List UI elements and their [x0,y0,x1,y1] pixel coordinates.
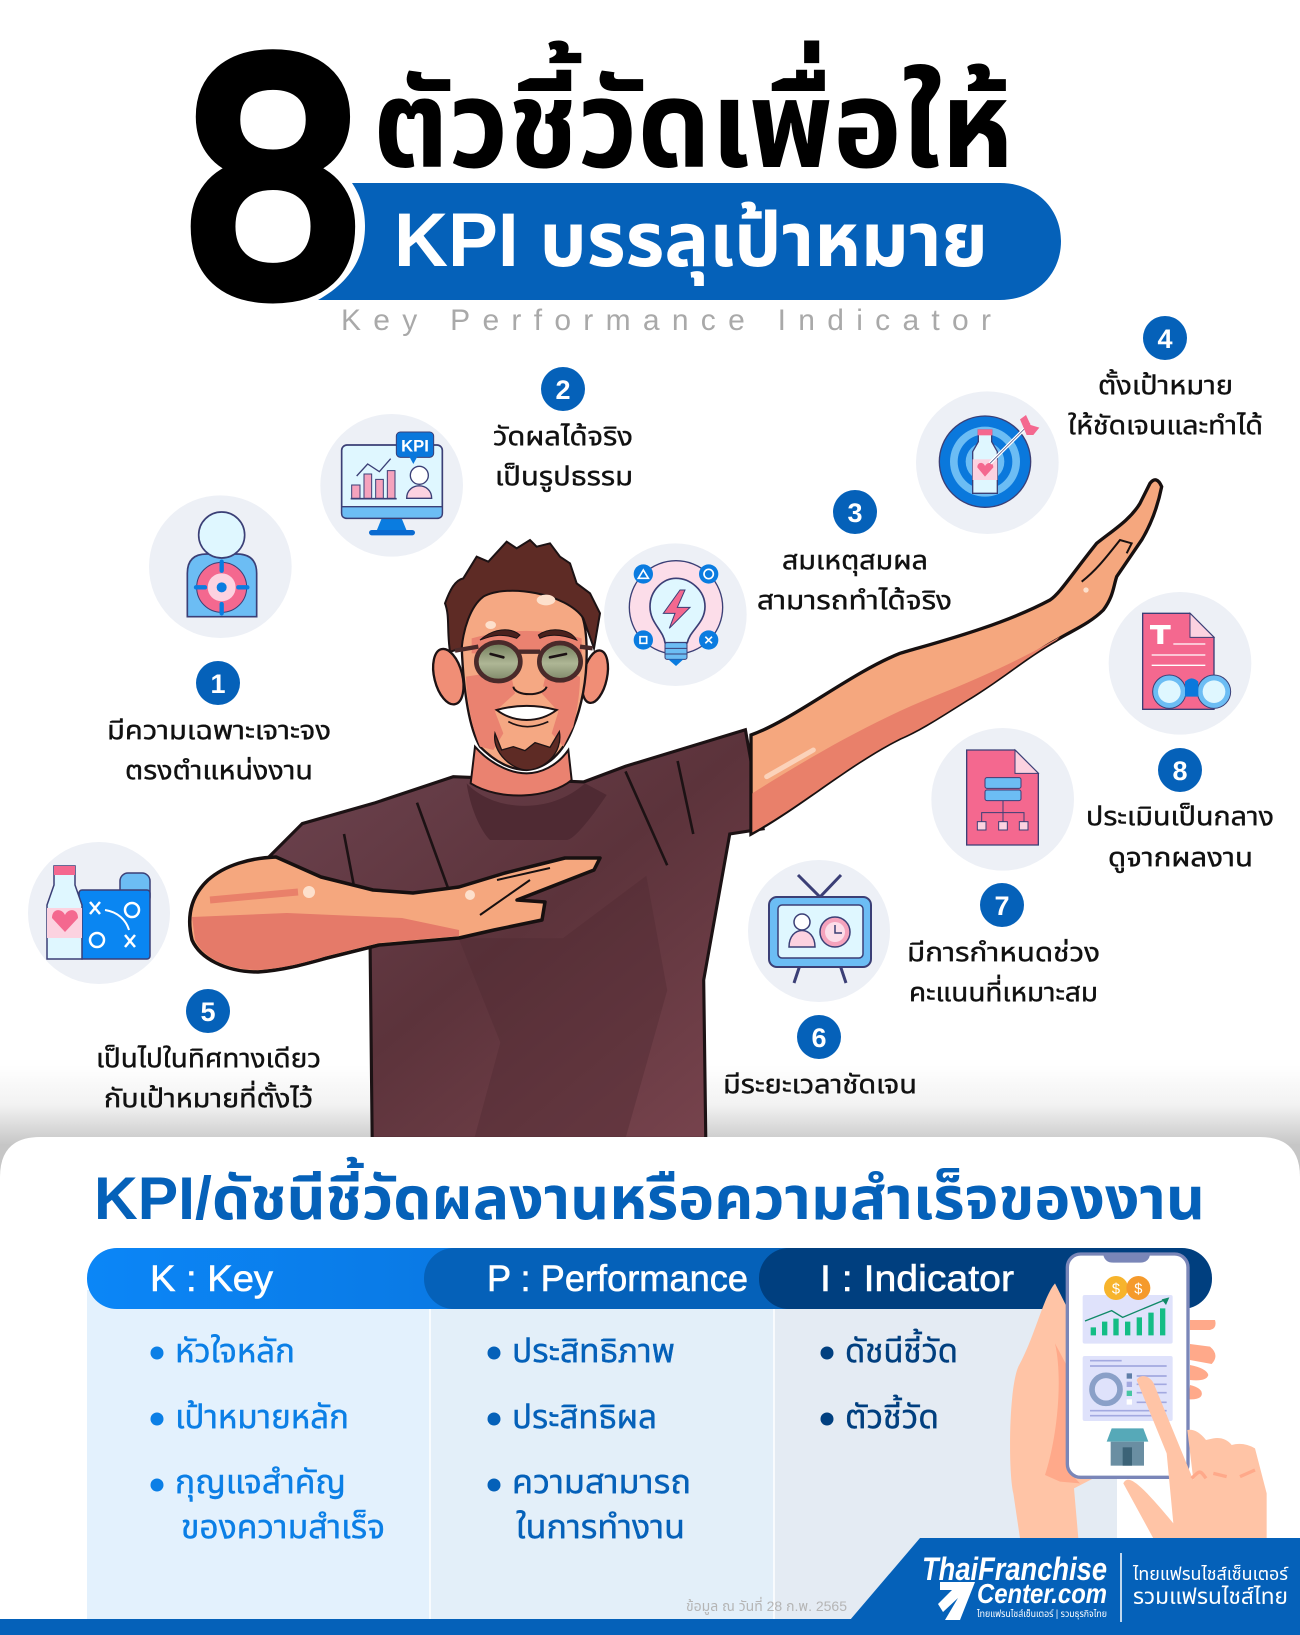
date note: ข้อมูล ณ วันที่ 28 ก.พ. 2565 [686,1596,847,1615]
logo: ThaiFranchise Center: ไทยแฟรนไชส์เซ็นเตอร์ | รวมธุรกิจไทย [976,1607,1107,1620]
column K list [151,1332,385,1545]
panel: KPI definition [0,1137,1300,1635]
title: first line: ตัวชี้วัดเพื่อให้ [373,40,1013,193]
face [462,588,587,770]
item 1: มีความเฉพาะเจาะจง [107,715,331,745]
shirt [269,730,763,1138]
item 5: 5 [200,997,216,1027]
icon 2: KPI monitor: KPI [401,436,429,455]
panel heading: KPI/ดัชนีชี้วัดผลงานหรือความสำเร็จของงาน [94,1156,1205,1232]
column P list: ความสามารถ [512,1463,691,1500]
icon: logo arrow [938,1582,975,1620]
raised arm [751,480,1162,834]
item 7: มีการกำหนดช่วง [907,937,1100,967]
item 3: 3 [847,498,863,528]
item 1: ตรงตำแหน่งงาน [125,755,313,785]
item 6: มีระยะเวลาชัดเจน [723,1069,917,1099]
column K list: ของความสำเร็จ [181,1508,385,1545]
column P list: ประสิทธิผล [512,1398,657,1435]
hair [445,540,600,652]
subtitle: Key Performance Indicator [341,304,991,337]
column I list: ตัวชี้วัด [845,1394,939,1435]
illustration: man dabbing [190,480,1162,1138]
ears [428,646,469,708]
title: number 8: 8 [178,0,368,366]
logo: ThaiFranchise Center [850,1538,1300,1622]
item 8: ดูจากผลงาน [1108,842,1253,873]
icon 7: document with hierarchy [931,728,1074,871]
item 6 [723,1015,917,1099]
column I list [821,1328,958,1435]
column headers: P : Performance [487,1258,748,1299]
item 2: วัดผลได้จริง [493,421,633,451]
item 4: ตั้งเป้าหมาย [1098,368,1233,400]
icon 2: KPI monitor [320,414,463,557]
item 1 [107,661,331,785]
item 3: สมเหตุสมผล [782,545,928,576]
item 3 [757,490,952,615]
icon 1: person with target [149,495,292,638]
column headers [87,1248,1212,1309]
beard [495,732,560,770]
item 7: คะแนนที่เหมาะสม [909,974,1098,1007]
column K list: เป้าหมายหลัก [175,1398,349,1435]
item 8 [1086,748,1274,873]
neck [471,747,572,796]
item 4: ให้ชัดเจนและทำได้ [1068,410,1263,440]
illustration: hand holding phone [1010,1254,1267,1538]
item 2: 2 [555,375,571,405]
column I list: ดัชนีชี้วัด [845,1328,958,1369]
column K list: หัวใจหลัก [175,1332,295,1369]
item 5: เป็นไปในทิศทางเดียว [96,1043,321,1073]
folded arm [190,857,600,972]
icon 8: document with binoculars [1109,592,1251,735]
column P list: ในการทำงาน [516,1508,685,1545]
column headers: I : Indicator [820,1258,1014,1299]
icon 4: target with bottle and arrow [916,391,1059,534]
column P list: ประสิทธิภาพ [512,1332,675,1369]
nose and mouth [513,687,547,694]
column P list [488,1332,691,1545]
logo: ThaiFranchise Center: รวมแฟรนไชส์ไทย [1133,1584,1288,1609]
item 7 [907,883,1100,1007]
item 3: สามารถทำได้จริง [757,585,952,615]
item 5 [96,989,321,1113]
illustration: hand holding phone: $ [1134,1281,1142,1297]
item 2: เป็นรูปธรรม [495,461,633,492]
item 4: 4 [1157,324,1173,354]
logo: ThaiFranchise Center: ไทยแฟรนไชส์เซ็นเตอร์ [1132,1564,1289,1584]
item 8: ประเมินเป็นกลาง [1086,801,1274,831]
title: blue banner: KPI บรรลุเป้าหมาย [394,198,988,286]
item 7: 7 [994,891,1010,921]
brows [480,630,577,640]
item 4 [1068,316,1263,440]
column backgrounds [87,1290,1117,1620]
glasses [476,642,520,681]
bottom band [0,1619,1300,1635]
logo: ThaiFranchise Center: ThaiFranchise [922,1551,1107,1587]
icon 6: TV with clock [748,860,890,1002]
item 2 [493,367,633,492]
item 8: 8 [1172,756,1188,786]
title: blue banner [318,183,1061,300]
icon 3: light bulb [604,543,747,686]
column K list: กุญแจสำคัญ [175,1463,346,1502]
column headers: K : Key [150,1258,274,1299]
illustration: hand holding phone: $ [1112,1281,1120,1297]
icon 5: bottle and plan map [28,842,170,984]
item 1: 1 [210,669,226,699]
item 5: กับเป้าหมายที่ตั้งไว้ [104,1080,313,1113]
item 6: 6 [811,1023,827,1053]
logo: ThaiFranchise Center: Center.com [977,1578,1107,1609]
